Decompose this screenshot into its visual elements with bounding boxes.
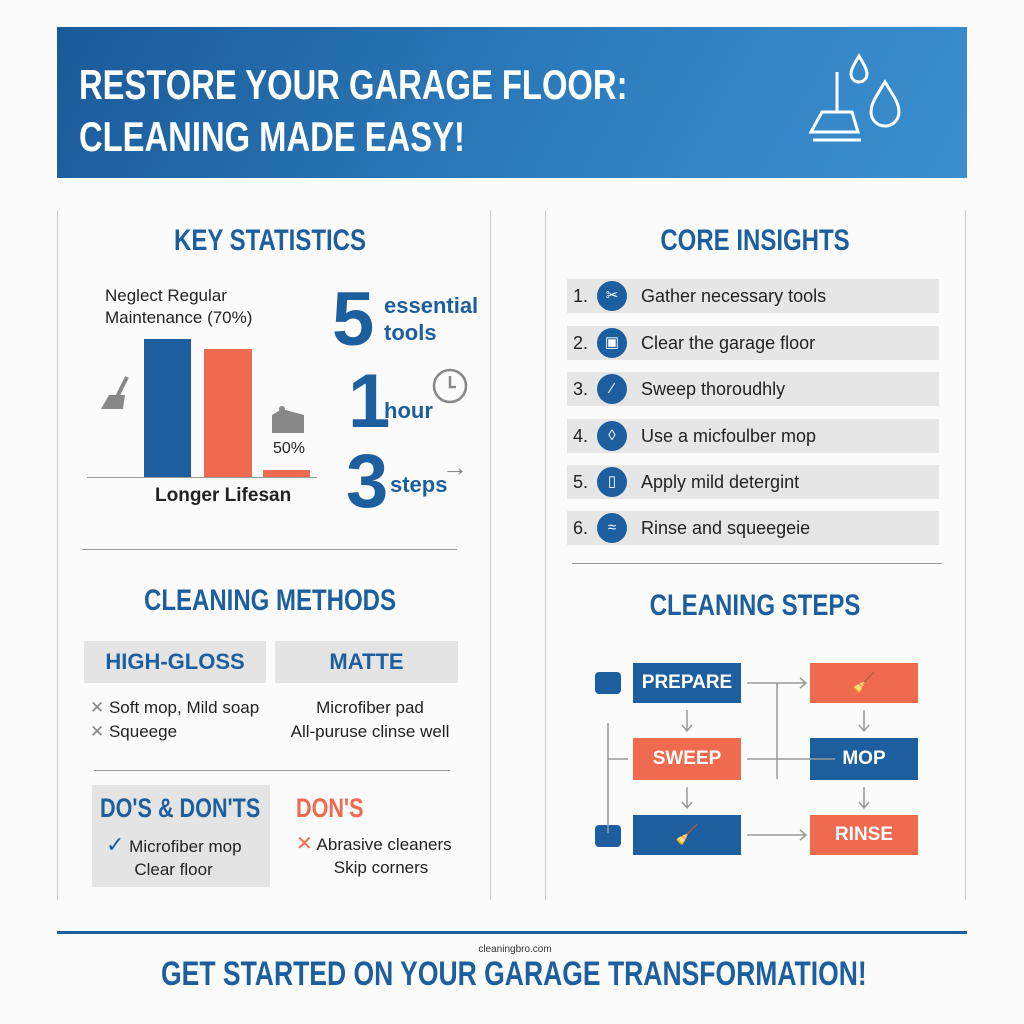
methods table: [84, 641, 458, 741]
flowchart: SWEEP: [653, 748, 721, 769]
stats numbers: essential: [384, 293, 478, 318]
do's and don'ts: DO'S & DON'TS: [100, 793, 260, 823]
do's and don'ts: Skip corners: [334, 858, 428, 877]
icon: squeegee and drops: [808, 53, 900, 142]
insights list: ▯: [608, 473, 616, 490]
insights list: Gather necessary tools: [641, 286, 826, 306]
insights list: 2.: [573, 332, 588, 352]
bar chart: Maintenance (70%): [105, 308, 252, 327]
flowchart: 🧹: [675, 825, 699, 846]
stats numbers: hour: [384, 398, 433, 423]
title: CLEANING MADE EASY!: [79, 113, 465, 160]
bar chart: Longer Lifesan: [155, 485, 291, 506]
insights list: Apply mild detergint: [641, 472, 799, 492]
do's and don'ts: [92, 785, 452, 887]
insights list: 3.: [573, 378, 588, 398]
bar chart: 50%: [273, 440, 305, 457]
flowchart: 🧹: [852, 673, 876, 694]
methods table: ✕ Squeege: [90, 722, 177, 741]
flowchart: PREPARE: [642, 672, 732, 693]
insights list: Sweep thoroudhly: [641, 378, 785, 398]
heading: cleaning steps: CLEANING STEPS: [650, 589, 860, 622]
do's and don'ts: ✕ Abrasive cleaners: [296, 833, 452, 855]
methods table: Microfiber pad: [316, 698, 424, 717]
do's and don'ts: ✓ Microfiber mop: [106, 832, 242, 857]
methods table: HIGH-GLOSS: [105, 649, 245, 674]
bar chart: Neglect Regular: [105, 286, 227, 305]
title: [79, 61, 627, 160]
stats numbers: tools: [384, 320, 437, 345]
flowchart: MOP: [842, 748, 886, 769]
insights list: 1.: [573, 286, 588, 306]
insights list: ✂: [606, 287, 618, 304]
footer line: [57, 931, 967, 934]
heading: cleaning methods: CLEANING METHODS: [144, 584, 396, 617]
stats numbers: steps: [390, 472, 447, 497]
insights list: Clear the garage floor: [641, 332, 815, 352]
flowchart: RINSE: [835, 824, 893, 845]
source text: cleaningbro.com: [478, 944, 552, 955]
call to action: GET STARTED ON YOUR GARAGE TRANSFORMATION!: [161, 955, 867, 993]
methods table: All-puruse clinse well: [291, 722, 449, 741]
stats numbers: 1: [348, 359, 390, 444]
insights list: 4.: [573, 426, 588, 446]
insights list: Rinse and squeegeie: [641, 518, 810, 538]
methods table: MATTE: [329, 649, 404, 674]
insights list: ◊: [608, 427, 616, 444]
do's and don'ts: DON'S: [296, 793, 364, 823]
do's and don'ts: Clear floor: [134, 860, 213, 879]
header banner: [57, 27, 967, 178]
insights list: ≈: [608, 519, 616, 536]
insights list: 5.: [573, 472, 588, 492]
stats numbers: 5: [332, 277, 374, 362]
stats numbers: →: [442, 452, 468, 482]
panel borders: [57, 210, 58, 900]
flowchart: [595, 663, 918, 855]
heading: core insights: CORE INSIGHTS: [660, 224, 850, 257]
insights list: ▣: [605, 334, 619, 351]
stats numbers: [332, 277, 478, 524]
title: RESTORE YOUR GARAGE FLOOR:: [79, 61, 627, 108]
insights list: [567, 279, 939, 545]
methods table: ✕ Soft mop, Mild soap: [90, 698, 259, 717]
insights list: ⁄: [611, 380, 613, 397]
bar chart: [87, 286, 317, 506]
insights list: 6.: [573, 518, 588, 538]
stats numbers: 3: [346, 439, 388, 524]
insights list: Use a micfoulber mop: [641, 426, 816, 446]
heading: key statistics: KEY STATISTICS: [174, 224, 366, 257]
